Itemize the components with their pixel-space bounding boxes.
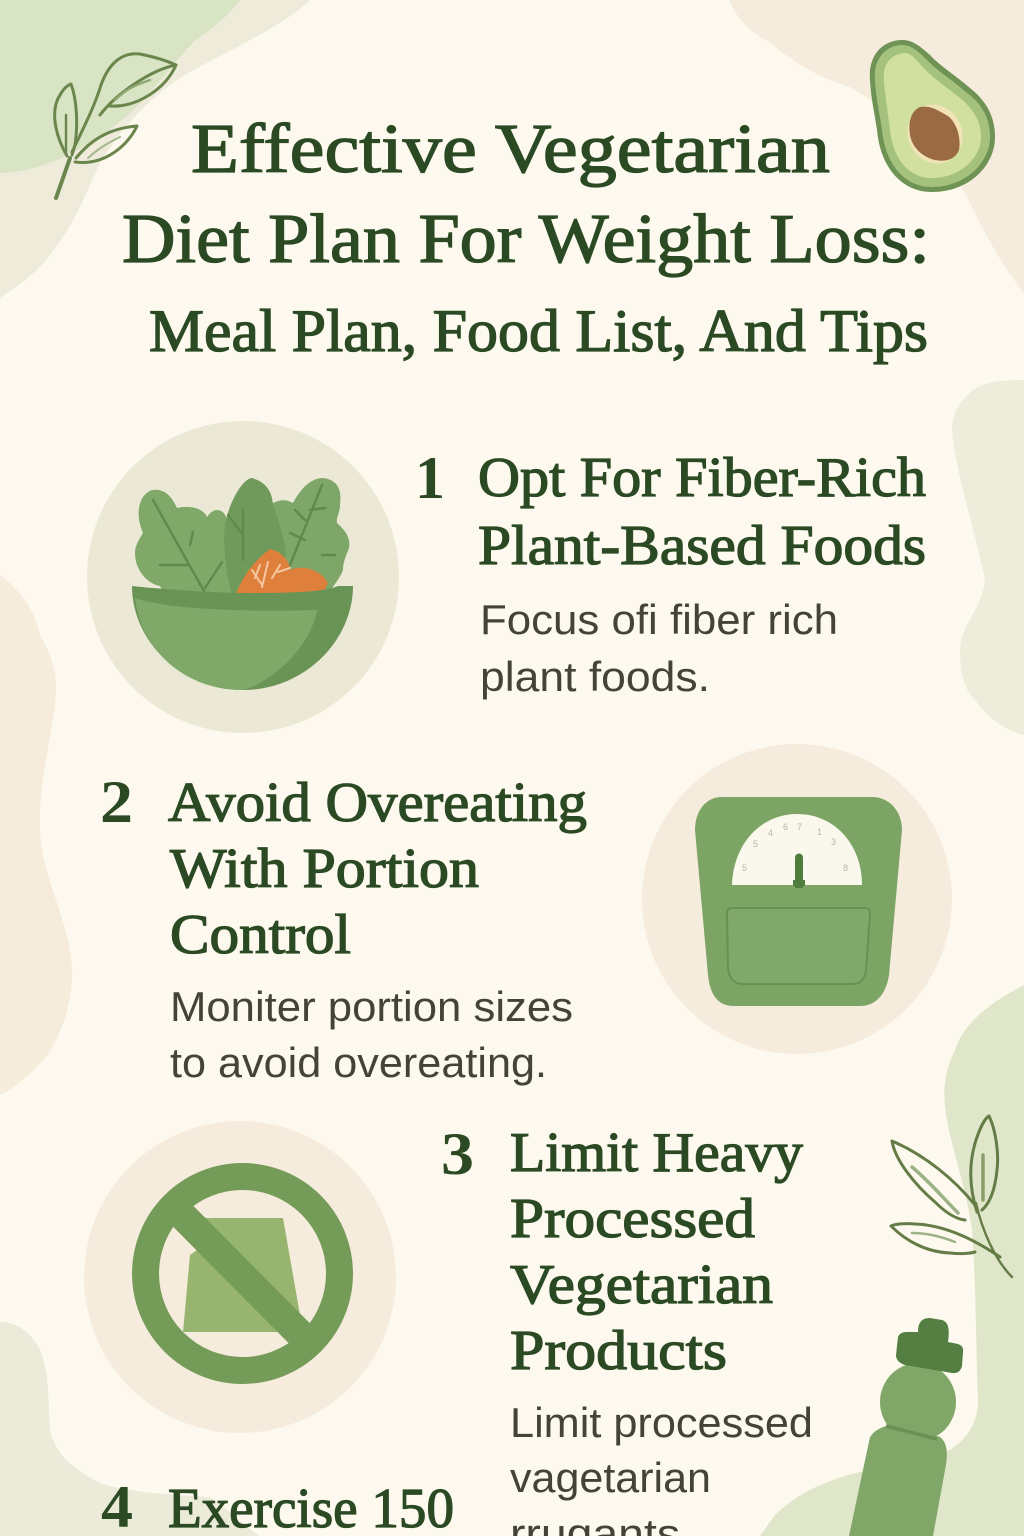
- step 3: 3: [441, 1121, 474, 1187]
- title: Effective Vegetarian: [191, 111, 830, 188]
- icon: weighing scale: 3: [831, 837, 836, 847]
- step 1: 1: [415, 445, 445, 511]
- step 2: 2: [100, 769, 133, 835]
- step 3: Limit Heavy: [510, 1122, 803, 1184]
- step 2: Control: [170, 904, 351, 966]
- step 3: Limit processed: [510, 1399, 813, 1446]
- title: Diet Plan For Weight Loss:: [122, 201, 930, 278]
- step 3: [441, 1121, 813, 1536]
- icon: salad bowl: [87, 421, 399, 733]
- step 3: Vegetarian: [510, 1254, 773, 1316]
- icon: no processed food: [84, 1121, 396, 1433]
- title: Meal Plan, Food List, And Tips: [149, 298, 928, 364]
- step 2: to avoid overeating.: [170, 1039, 547, 1086]
- icon: weighing scale: [642, 744, 952, 1054]
- step 2: With Portion: [170, 838, 479, 900]
- title: [122, 111, 930, 364]
- icon: avocado: [870, 40, 995, 192]
- icon: weighing scale: 5: [753, 839, 758, 849]
- icon: weighing scale: 7: [797, 822, 802, 832]
- icon: weighing scale: 1: [817, 827, 822, 837]
- step 2: Moniter portion sizes: [170, 983, 573, 1030]
- icon: leaf sprig top left: [55, 54, 176, 198]
- step 3: vagetarian: [510, 1454, 711, 1501]
- step 1: [415, 445, 926, 700]
- step 1: Opt For Fiber-Rich: [478, 447, 926, 509]
- step 3: Processed: [510, 1188, 755, 1250]
- icon: water bottle: [849, 1318, 963, 1536]
- step 1: Plant-Based Foods: [478, 515, 926, 577]
- icon: weighing scale: 6: [783, 822, 788, 832]
- step 2: Avoid Overeating: [168, 772, 587, 834]
- step 1: plant foods.: [480, 653, 710, 700]
- icon: leaf sprig bottom right: [891, 1116, 1012, 1277]
- step 1: Focus ofi fiber rich: [480, 596, 838, 643]
- step 2: [100, 769, 587, 1086]
- icon: weighing scale: 5: [742, 863, 747, 873]
- step 3: Products: [510, 1320, 727, 1382]
- icon: weighing scale: 8: [843, 863, 848, 873]
- icon: weighing scale: 4: [768, 828, 773, 838]
